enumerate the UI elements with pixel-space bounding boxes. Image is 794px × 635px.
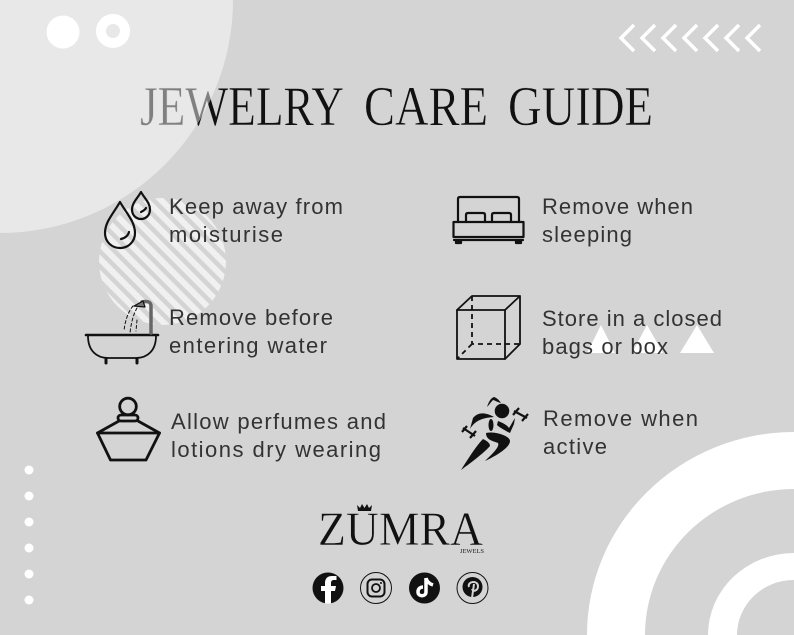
text: allow perfumes: lotions dry wearing: [171, 437, 381, 462]
icon: bathtub: [86, 301, 158, 363]
dots column: [24, 466, 34, 604]
item: active: [461, 397, 698, 470]
text: remove when active: Remove when: [543, 406, 698, 431]
icon: tiktok: [409, 572, 440, 604]
striped circle: [99, 198, 226, 325]
triangles: [587, 325, 714, 353]
icon: pinterest: [457, 572, 488, 604]
title: JEWELRY: [140, 76, 344, 138]
text: remove when active: active: [543, 434, 607, 459]
item: sleeping: [454, 194, 693, 247]
item: perfume: [98, 398, 386, 462]
text: remove before: Remove before: [169, 305, 333, 330]
icon: perfume bottle: [98, 398, 160, 460]
logo: ZUMRA: [318, 503, 483, 556]
title: [140, 88, 651, 126]
text: keep away: moisturise: [169, 222, 283, 247]
item: water: [86, 301, 333, 363]
text: store: Store in a closed: [542, 306, 722, 331]
text: remove when sleeping: Remove when: [542, 194, 693, 219]
social icons: [312, 572, 488, 604]
text: remove before: entering water: [169, 333, 327, 358]
item: moisturise: [105, 192, 343, 248]
text: allow perfumes: Allow perfumes and: [171, 409, 386, 434]
icon: instagram: [360, 572, 392, 604]
concentric arcs: [587, 432, 794, 635]
icon: bed: [454, 197, 524, 243]
item: storage: [457, 296, 722, 359]
chevrons: [621, 25, 760, 51]
text: store: bags or box: [542, 334, 668, 359]
title: GUIDE: [508, 76, 653, 138]
top circles: [46, 16, 125, 48]
title: CARE: [364, 76, 488, 138]
icon: runner: [461, 397, 528, 470]
icon: box: [457, 296, 520, 359]
logo: JEWELS: [460, 548, 484, 555]
text: remove when sleeping: sleeping: [542, 222, 632, 247]
title: JEWELRY: [140, 76, 344, 138]
icon: facebook: [312, 572, 344, 604]
icon: water drops: [105, 192, 150, 248]
text: keep away: Keep away from: [169, 194, 343, 219]
decorative light circle: [0, 0, 233, 233]
